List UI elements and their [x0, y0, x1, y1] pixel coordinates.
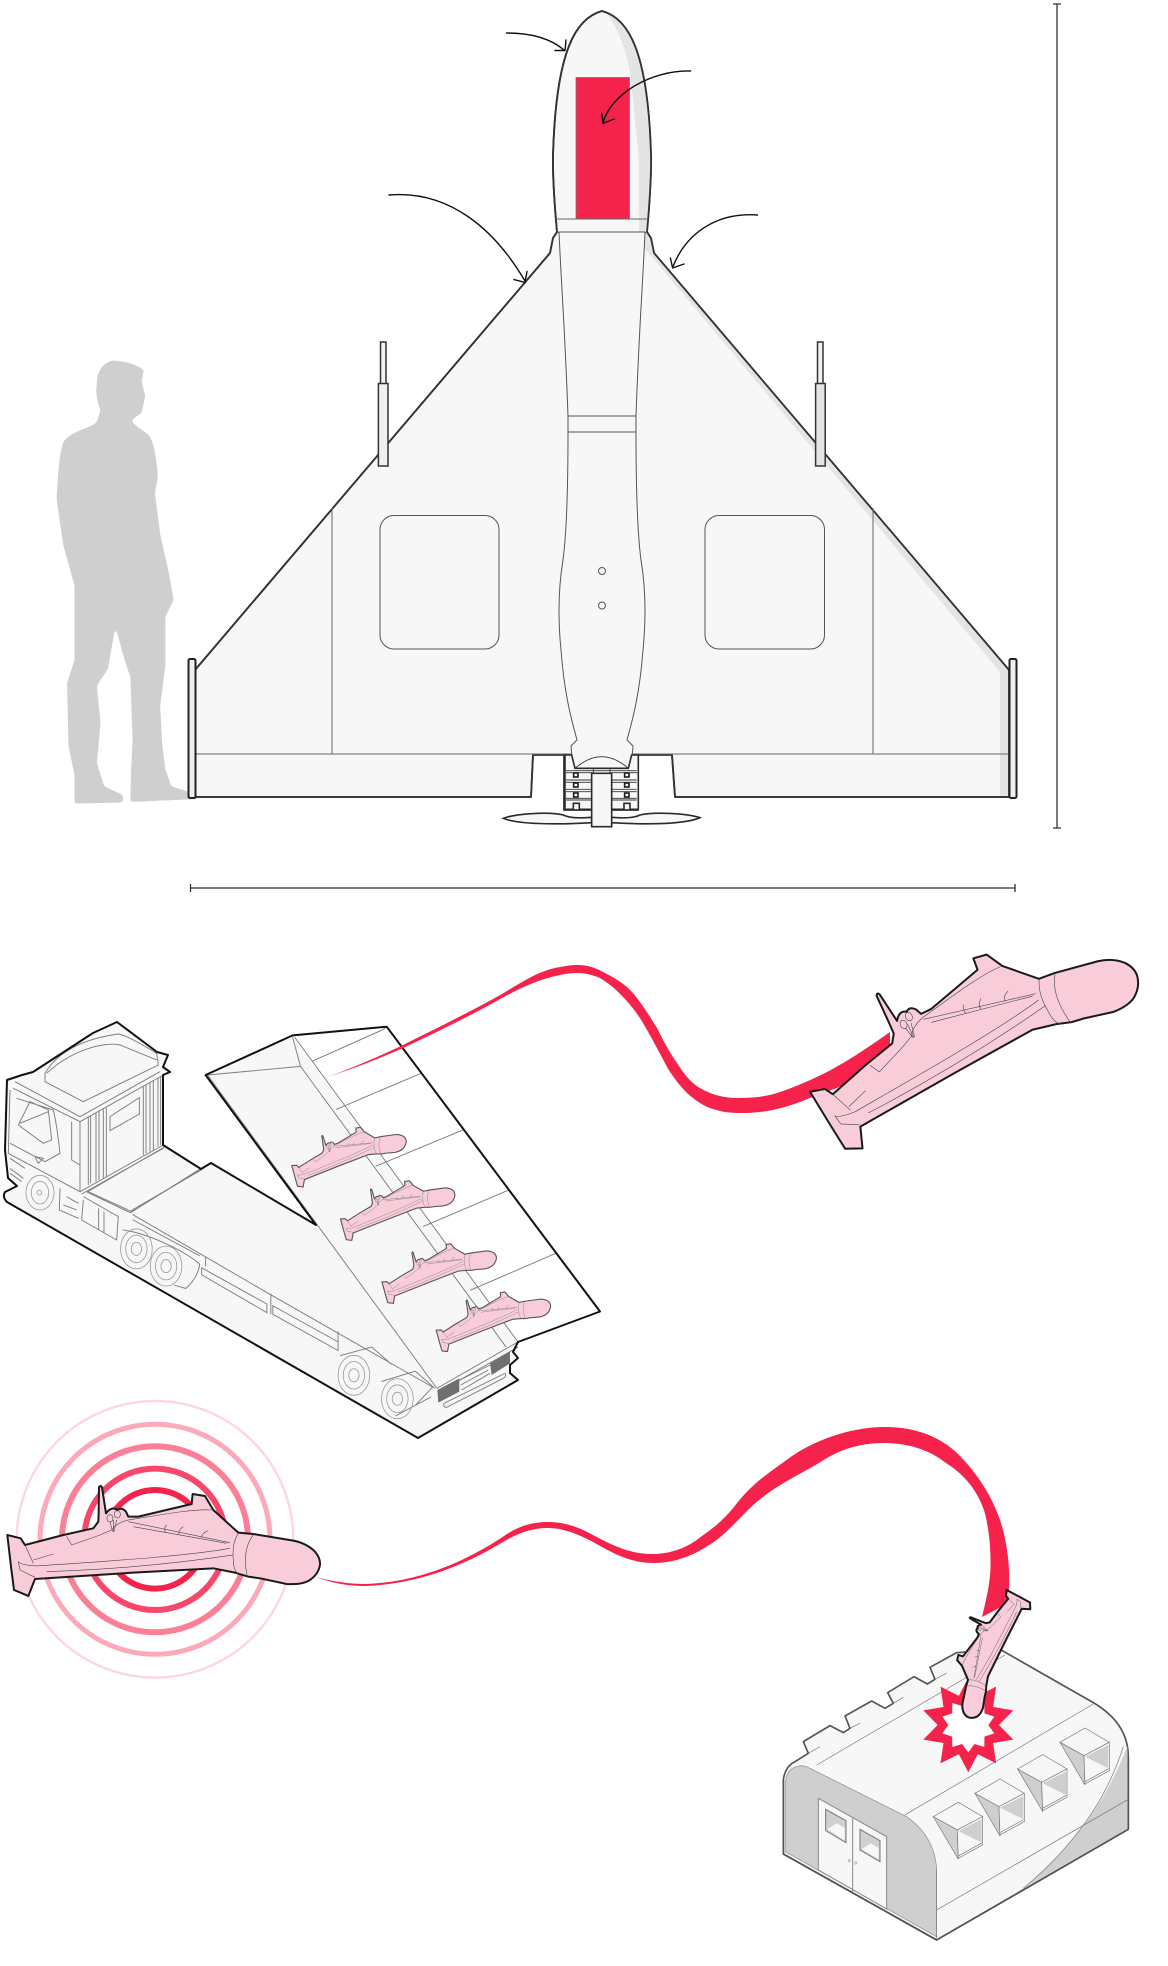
building end wall: [786, 1766, 937, 1937]
left antenna: [378, 342, 388, 466]
engine and propeller: [503, 755, 700, 827]
propeller hub: [592, 773, 612, 827]
launched drone in flight: [785, 889, 1153, 1158]
trailer rear lights: [437, 1352, 510, 1407]
target building: [783, 1649, 1128, 1940]
human silhouette for scale: [57, 360, 200, 804]
truck base and launcher body: [4, 1022, 600, 1438]
launcher open white area: [293, 1027, 600, 1342]
launcher rails and trailer lines: [87, 1028, 556, 1419]
right end plate: [1010, 659, 1016, 798]
callout arrow: nose: [506, 33, 566, 50]
cylinder bolts: [574, 773, 629, 797]
fuel caps: [598, 568, 606, 609]
engine cylinders: [565, 755, 638, 809]
callout arrow: warhead: [602, 71, 690, 123]
callout arrow: left wing: [389, 195, 527, 282]
left end plate: [188, 659, 196, 798]
building body: [783, 1649, 1128, 1940]
drone striking building: [934, 1581, 1034, 1723]
launch truck: [4, 1022, 600, 1438]
wingspan dimension line: [190, 884, 1015, 892]
drone with signal: [7, 1486, 320, 1596]
skylight 4: [1060, 1728, 1109, 1785]
skylight 3: [1018, 1755, 1067, 1812]
rear shaded wall: [1023, 1747, 1127, 1888]
drone on launcher 1: [289, 1110, 408, 1189]
shading on wing edge and nose: [606, 13, 1008, 796]
building outline bottom redraw: [783, 1757, 1128, 1940]
collar lines: [196, 219, 1009, 754]
main drone top view: [188, 11, 1016, 827]
airframe outline redraw: [195, 11, 1009, 797]
warhead section: [576, 78, 630, 219]
left wing hatch: [380, 516, 499, 649]
explosion burst: [923, 1678, 1013, 1772]
height dimension line: [1053, 4, 1061, 828]
fuselage outline: [559, 232, 645, 768]
building doors: [818, 1798, 887, 1909]
drone on launcher 2: [337, 1164, 457, 1243]
propeller: [503, 813, 700, 824]
cooling fins: [566, 757, 637, 800]
truck cab details: [8, 1034, 200, 1240]
drone on launcher 3: [379, 1227, 498, 1306]
callout arrow: right wing: [670, 215, 758, 268]
skylight 1: [933, 1802, 983, 1859]
right wing hatch: [705, 516, 824, 649]
launch flight path ribbon: [328, 965, 890, 1113]
fuselage band: [568, 416, 636, 432]
airframe wing and nose body: [195, 11, 1009, 810]
truck black outline: [4, 1022, 600, 1438]
signal rings: [17, 1401, 293, 1678]
drone on launcher 4: [433, 1275, 553, 1354]
skylight 2: [975, 1779, 1024, 1836]
attack flight path ribbon: [316, 1427, 1009, 1617]
roof and wall lines: [808, 1655, 1127, 1938]
right antenna: [816, 342, 825, 466]
